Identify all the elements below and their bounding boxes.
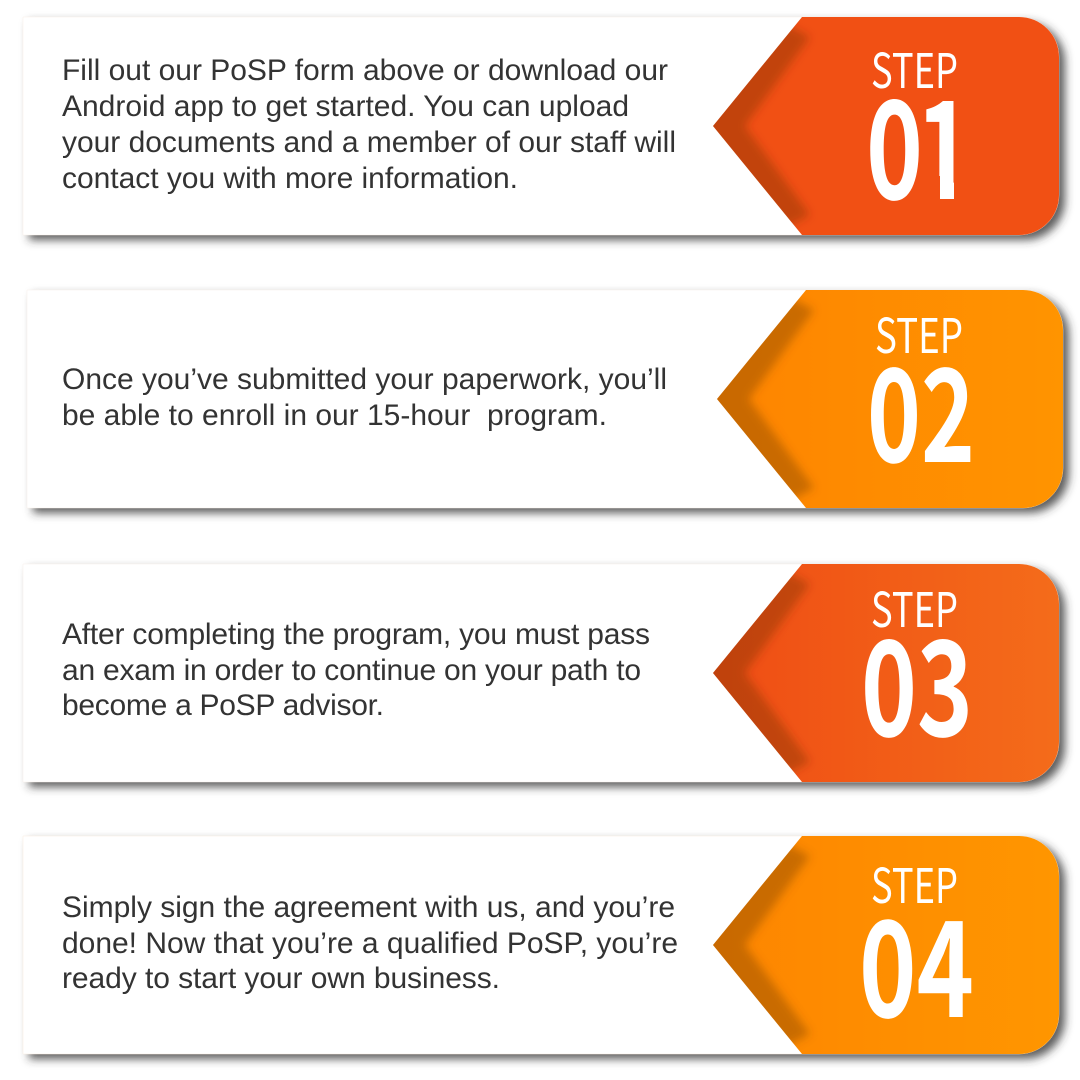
step number: 1 (916, 42, 973, 239)
step label: STEP (871, 847, 958, 917)
description text: become a PoSP advisor. (62, 689, 384, 722)
white card (27, 290, 1063, 508)
description text: Android app to get started. You can upload (62, 90, 629, 123)
panel: step 3 (23, 564, 1065, 787)
white card (23, 836, 1059, 1054)
description text (62, 618, 650, 722)
description text (62, 54, 676, 195)
description text: ready to start your own business. (62, 962, 500, 995)
step label: STEP (871, 571, 958, 641)
description text: After completing the program, you must pass (62, 618, 650, 651)
orange tag (693, 564, 1063, 782)
step number: 0 (866, 42, 923, 239)
orange tag (697, 290, 1067, 508)
panel: step 1 (23, 17, 1065, 240)
description text: an exam in order to continue on your path to (62, 654, 641, 687)
orange tag (693, 17, 1063, 235)
description text: done! Now that you’re a qualified PoSP, you’re (62, 927, 678, 960)
panel: step 4 (23, 836, 1065, 1059)
step number: 04 (859, 864, 974, 1056)
orange tag (693, 836, 1063, 1054)
description text: Once you’ve submitted your paperwork, you’ll (62, 363, 667, 396)
card shadow (29, 569, 1065, 787)
description text (62, 363, 667, 432)
panel: step 2 (27, 290, 1069, 513)
step number: 02 (867, 313, 975, 500)
description text: be able to enroll in our 15-hour program. (62, 399, 607, 432)
description text (62, 891, 678, 995)
card shadow (29, 841, 1065, 1059)
description text: Simply sign the agreement with us, and you’re (62, 891, 675, 924)
white card (23, 17, 1059, 235)
card shadow (33, 295, 1069, 513)
description text: your documents and a member of our staff will (62, 126, 676, 159)
step label: STEP (875, 297, 963, 367)
step number: 03 (861, 584, 973, 775)
card shadow (29, 22, 1065, 240)
description text: contact you with more information. (62, 162, 518, 195)
description text: Fill out our PoSP form above or download our (62, 54, 668, 87)
white card (23, 564, 1059, 782)
step label: STEP (871, 32, 958, 102)
